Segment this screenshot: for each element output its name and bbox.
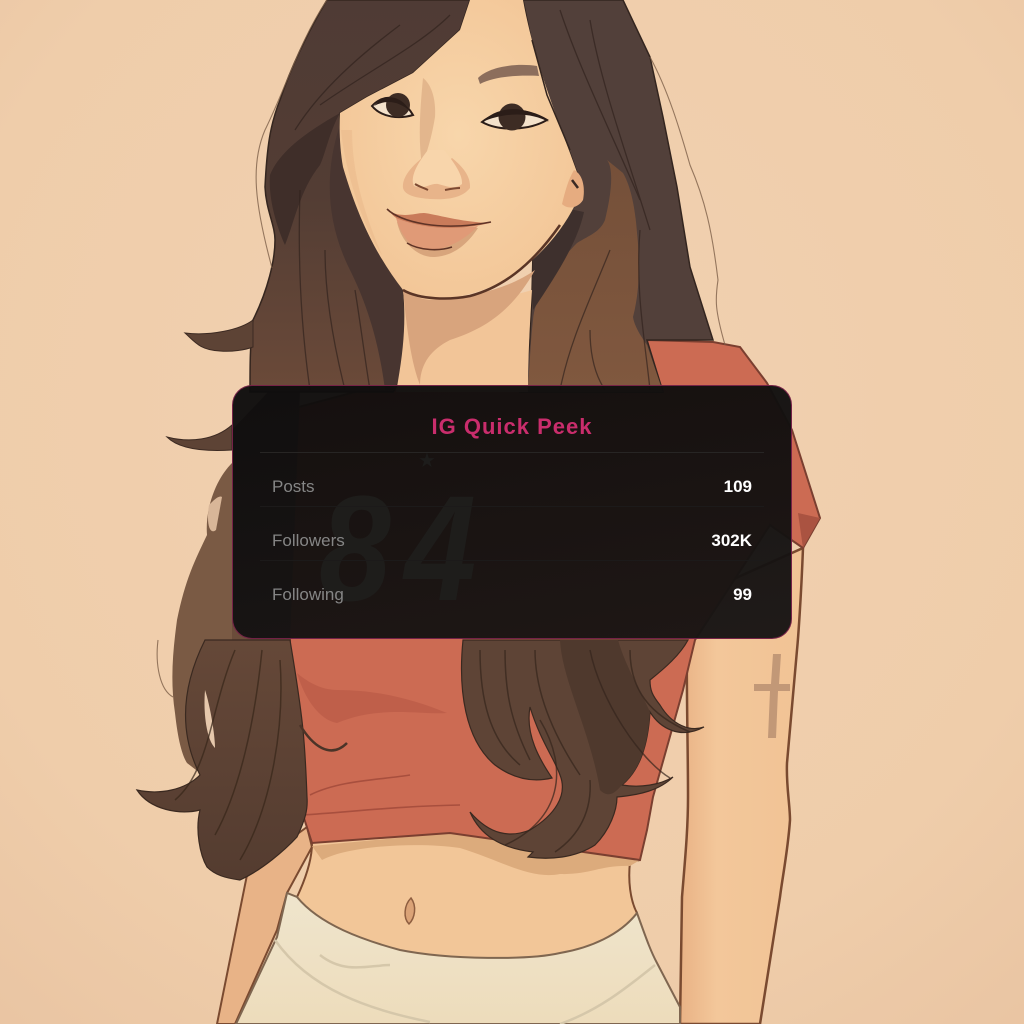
upper left hair <box>250 0 470 392</box>
row: following: Following <box>272 585 344 604</box>
nose bridge shade <box>420 78 435 165</box>
row: following <box>272 585 752 604</box>
lower lip <box>396 218 478 250</box>
row: followers: Followers <box>272 531 345 550</box>
card title: IG Quick Peek <box>432 414 592 439</box>
shirt fold shading <box>297 673 447 723</box>
eye right <box>482 104 549 130</box>
lock onto shirt <box>300 725 347 750</box>
eyebrow <box>478 65 539 84</box>
chin lip shadow <box>397 222 478 257</box>
side lock upper <box>185 320 253 351</box>
nose <box>403 158 470 199</box>
sliver in left hair <box>208 497 222 531</box>
shirt cuff <box>798 513 820 548</box>
neck shadow <box>403 270 535 385</box>
skirt <box>236 893 680 1024</box>
side lock lower <box>167 425 232 450</box>
strands lower right <box>480 650 690 852</box>
hair strands upper <box>295 10 650 390</box>
upper lip <box>390 212 490 228</box>
shirt <box>250 340 820 860</box>
shirt hem <box>303 775 460 815</box>
upper right hair <box>520 0 713 392</box>
belly shade under shirt <box>312 833 640 875</box>
midriff <box>290 831 640 980</box>
row: following: 99 <box>733 585 752 604</box>
flyaway strands <box>157 0 725 697</box>
lip line <box>387 209 491 250</box>
row: posts: Posts <box>272 477 315 496</box>
skirt folds <box>275 940 655 1024</box>
jersey number seen through card: 84 <box>319 464 490 632</box>
back hair left behind card <box>232 390 300 640</box>
right arm <box>680 548 803 1024</box>
lower right hair darker core <box>560 640 650 794</box>
dark strip below ear <box>532 207 584 310</box>
left cheek shading <box>341 130 382 255</box>
lower right hair mass <box>462 640 704 858</box>
jaw line <box>403 225 560 298</box>
face <box>340 0 578 300</box>
title divider <box>260 452 764 453</box>
left hair behind card edge <box>172 463 290 773</box>
sliver between lower-left locks <box>204 690 215 748</box>
row: posts: 109 <box>724 477 752 496</box>
neck <box>396 290 532 392</box>
brown highlight band <box>527 160 663 392</box>
row: posts <box>260 460 764 507</box>
row: followers <box>260 514 764 561</box>
nose tip highlight <box>413 150 462 187</box>
illustration: woman <box>137 0 820 1024</box>
eye left <box>372 93 413 117</box>
lower left hair <box>137 640 307 880</box>
dark under-fringe hair <box>270 113 340 245</box>
ear <box>562 170 584 207</box>
ear crease <box>572 180 578 188</box>
cross tattoo <box>754 654 790 738</box>
hair strand over temple <box>532 40 570 150</box>
stats card <box>232 385 792 639</box>
jersey star seen through card: ★ <box>418 450 436 472</box>
nostrils <box>415 184 460 190</box>
strands lower left <box>175 650 281 860</box>
dark strip beside face <box>330 125 405 390</box>
navel <box>405 898 415 924</box>
left arm <box>217 827 312 1024</box>
row: followers: 302K <box>711 531 752 550</box>
